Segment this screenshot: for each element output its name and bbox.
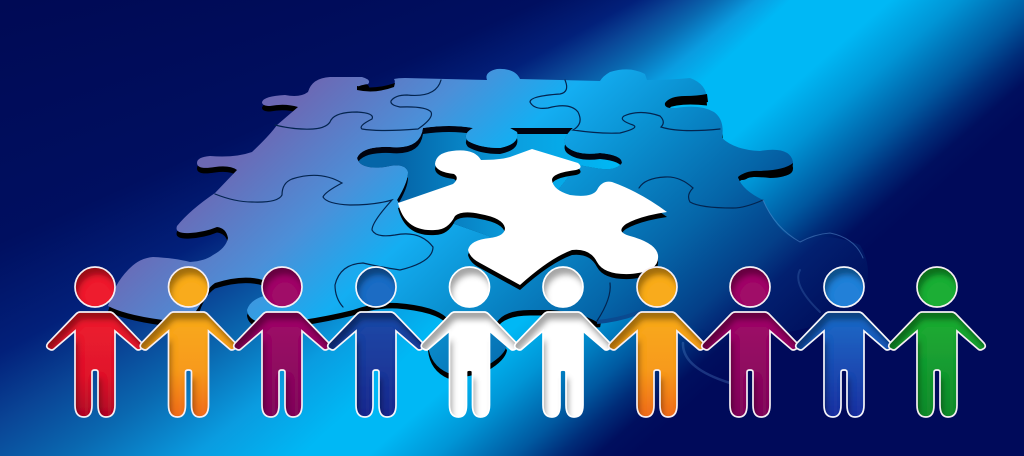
person 1: red [47, 267, 143, 417]
person 6: white [515, 267, 611, 417]
person 2: orange [140, 267, 237, 417]
person 5: white [421, 267, 518, 417]
person 3: magenta [234, 267, 330, 417]
puzzle seam lines [215, 80, 863, 383]
person 10: green [889, 267, 985, 417]
person 9: blue [796, 267, 892, 417]
row of people holding hands [47, 267, 985, 417]
person 7: orange [609, 267, 705, 417]
far right notch wall [738, 163, 793, 180]
right notch wall [665, 94, 708, 108]
puzzle board surface [108, 69, 868, 373]
white piece thickness [398, 154, 667, 290]
person 8: magenta [702, 267, 798, 417]
person 4: blue [328, 267, 424, 417]
puzzle board [108, 69, 868, 383]
blue strip beside lower edge [597, 312, 640, 322]
white piece surface [398, 149, 667, 285]
empty puzzle slot [357, 126, 622, 246]
puzzle board thickness [108, 84, 794, 378]
top notch wall [357, 83, 395, 91]
white puzzle piece [398, 149, 667, 290]
